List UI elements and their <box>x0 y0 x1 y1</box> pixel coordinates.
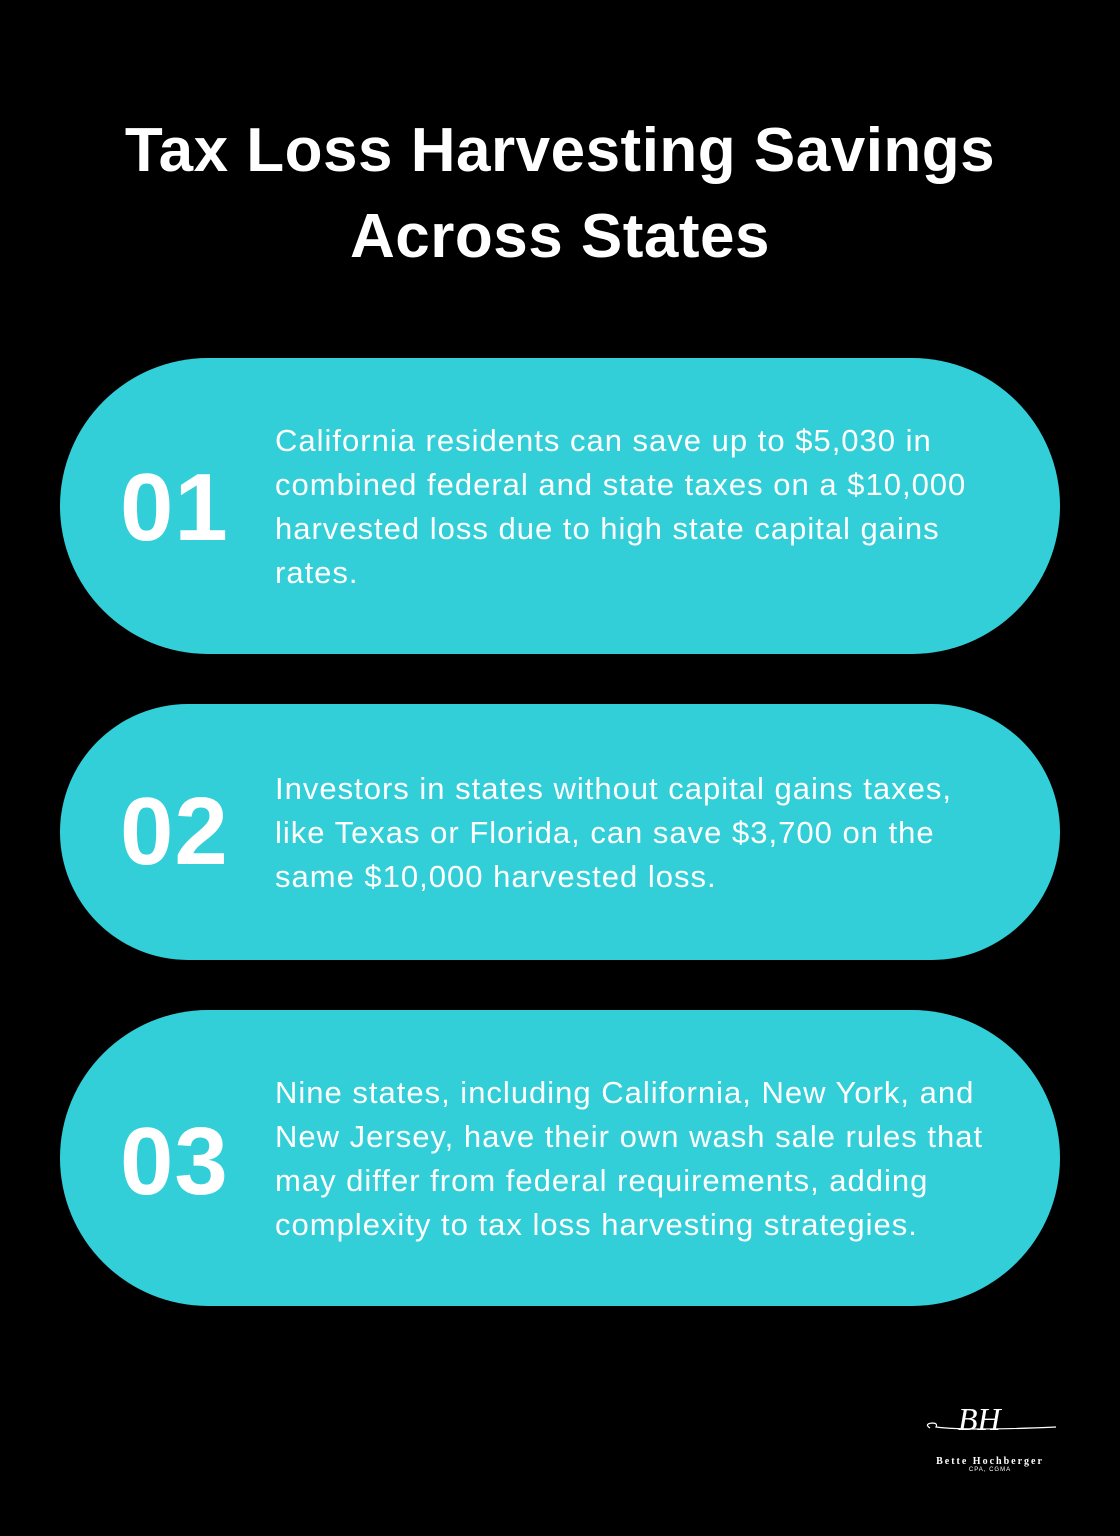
logo: Bette Hochberger <box>936 1456 1044 1467</box>
panel: 01 <box>60 358 1060 654</box>
logo: CPA, CGMA <box>969 1467 1011 1473</box>
title: Across States <box>350 202 770 271</box>
text 02: like Texas or Florida, can save $3,700 on the <box>275 815 935 850</box>
title <box>125 116 995 271</box>
logo: BH <box>958 1401 1003 1437</box>
text 03: complexity to tax loss harvesting strategies. <box>275 1207 918 1242</box>
text 03 <box>275 1075 983 1242</box>
logo <box>926 1401 1056 1473</box>
title: Tax Loss Harvesting Savings <box>125 116 995 185</box>
text 02: same $10,000 harvested loss. <box>275 859 717 894</box>
text 01: combined federal and state taxes on a $10,000 <box>275 467 966 502</box>
text 01 <box>275 423 966 590</box>
panel: 03 <box>60 1010 1060 1306</box>
text 03: New Jersey, have their own wash sale rules that <box>275 1119 983 1154</box>
number 01: 01 <box>120 454 229 561</box>
text 03: may differ from federal requirements, adding <box>275 1163 928 1198</box>
panel: 02 <box>60 704 1060 960</box>
number 03: 03 <box>120 1108 229 1215</box>
text 02: Investors in states without capital gains taxes, <box>275 771 952 806</box>
text 01: California residents can save up to $5,030 in <box>275 423 932 458</box>
text 01: harvested loss due to high state capital gains <box>275 511 940 546</box>
text 03: Nine states, including California, New York, and <box>275 1075 974 1110</box>
text 02 <box>275 771 952 894</box>
text 01: rates. <box>275 555 359 590</box>
number 02: 02 <box>120 778 229 885</box>
